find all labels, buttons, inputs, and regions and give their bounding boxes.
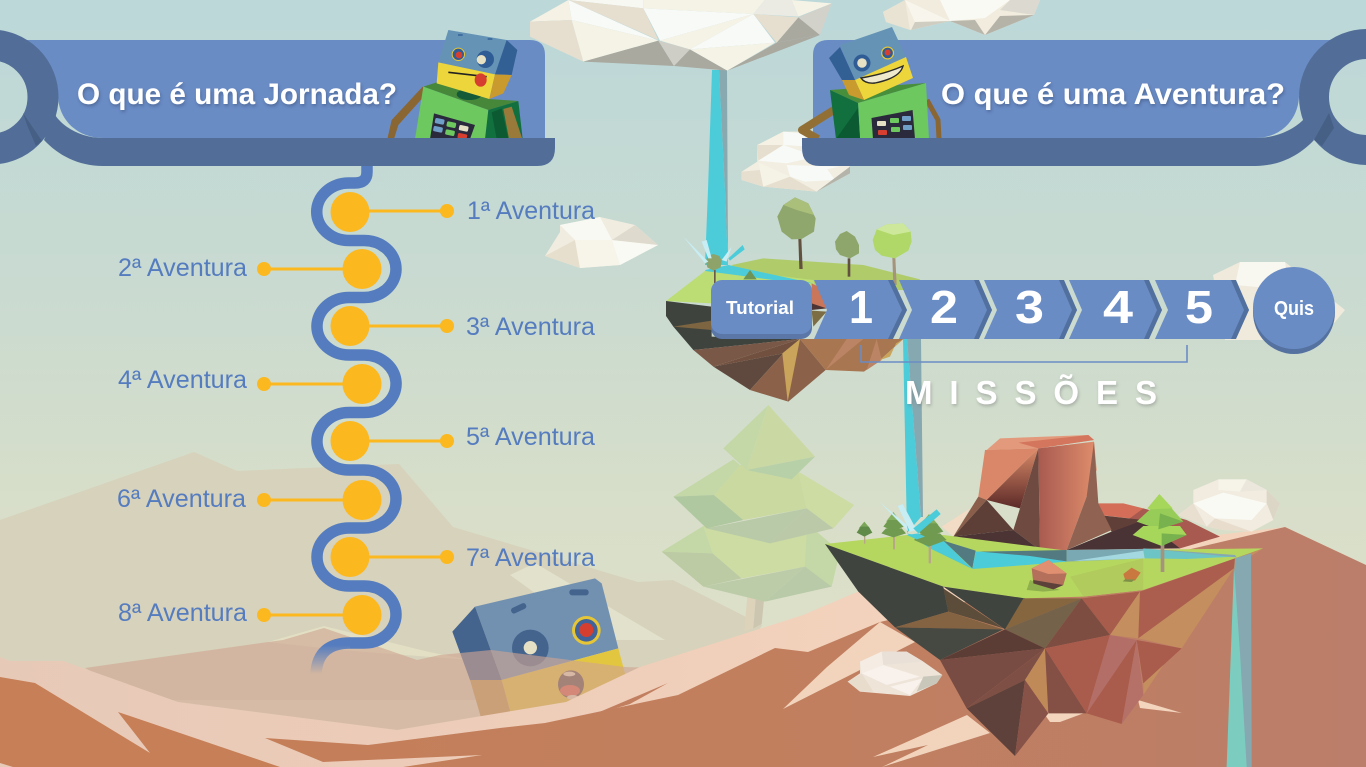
left ring shadow bbox=[23, 113, 42, 146]
right waterfall bbox=[1227, 553, 1252, 767]
step 5 bbox=[330, 421, 595, 461]
keypad bbox=[430, 113, 475, 140]
trees on small island bbox=[706, 197, 912, 285]
mission 2 bbox=[899, 280, 992, 339]
camera eye right bbox=[572, 616, 601, 645]
cloud: top right bbox=[883, 0, 1040, 35]
cloud: low bbox=[848, 652, 942, 696]
mesa rock bbox=[942, 435, 1220, 550]
rock small bbox=[1123, 568, 1141, 582]
pine trees bbox=[857, 494, 1187, 572]
Quis button: Quis bbox=[1274, 298, 1314, 320]
mission 1: 1 bbox=[849, 281, 873, 333]
left banner bbox=[0, 30, 555, 166]
step 2: 2ª Aventura bbox=[118, 254, 247, 282]
step 4: 4ª Aventura bbox=[118, 366, 247, 394]
mission 2: 2 bbox=[930, 281, 958, 333]
cloud: right of mesa bbox=[1178, 479, 1280, 532]
journey path bbox=[117, 166, 595, 674]
step 6 bbox=[117, 480, 382, 520]
step 3: 3ª Aventura bbox=[466, 313, 595, 341]
tree 3 bbox=[873, 223, 912, 285]
step 3 bbox=[330, 306, 595, 346]
left banner title: O que é uma Jornada? bbox=[77, 78, 397, 111]
middle waterfall between islands bbox=[903, 339, 923, 533]
camera eye left bbox=[512, 630, 549, 666]
missions bracket bbox=[861, 345, 1187, 362]
floating island: small bbox=[666, 258, 920, 402]
right banner ring bbox=[1314, 44, 1366, 150]
left banner ring bbox=[0, 45, 43, 149]
chevron row bbox=[711, 267, 1335, 354]
right banner lip bbox=[802, 118, 1314, 166]
step 6: 6ª Aventura bbox=[117, 485, 246, 513]
step 1 bbox=[330, 192, 595, 232]
tree small bbox=[706, 254, 722, 283]
translucent foreground hill bbox=[85, 628, 700, 740]
cloud: behind right banner bbox=[742, 132, 850, 192]
background mountains bbox=[0, 452, 762, 700]
mission 5 bbox=[1155, 280, 1249, 339]
river bbox=[907, 533, 1237, 569]
island underside bbox=[825, 544, 1263, 756]
robot: smiling bbox=[802, 27, 939, 139]
grass top bbox=[825, 535, 1263, 598]
left banner lip bbox=[44, 115, 555, 166]
Quis button bbox=[1253, 267, 1335, 354]
step 8: 8ª Aventura bbox=[118, 599, 247, 627]
line fade out bbox=[316, 643, 350, 674]
mission 5: 5 bbox=[1185, 281, 1213, 333]
step 7: 7ª Aventura bbox=[466, 544, 595, 572]
step 7 bbox=[330, 537, 595, 577]
mission 3: 3 bbox=[1015, 281, 1044, 333]
floating island: large with mesa bbox=[825, 435, 1263, 767]
screaming mouth bbox=[558, 670, 584, 700]
step 4 bbox=[118, 364, 382, 404]
foreground ground bbox=[0, 527, 1366, 767]
splash bbox=[879, 502, 941, 539]
step 5: 5ª Aventura bbox=[466, 423, 595, 451]
keypad bbox=[872, 110, 915, 139]
winding line bbox=[317, 166, 396, 643]
green strip bbox=[625, 668, 670, 695]
right banner title: O que é uma Aventura? bbox=[941, 78, 1285, 111]
step 1: 1ª Aventura bbox=[467, 197, 595, 225]
big pale pine tree bbox=[662, 405, 854, 632]
clouds bbox=[530, 0, 1345, 696]
crying camera robot behind the hill bbox=[452, 578, 627, 720]
Tutorial button bbox=[711, 280, 812, 339]
tree 2 bbox=[835, 231, 859, 277]
Tutorial button: Tutorial bbox=[726, 297, 794, 318]
upper waterfall from top cloud bbox=[705, 70, 728, 265]
left banner face bbox=[20, 40, 545, 138]
cloud: behind Quis bbox=[1213, 262, 1345, 340]
robot: tongue out bbox=[387, 30, 523, 140]
right banner bbox=[802, 27, 1366, 166]
right ring shadow bbox=[1314, 113, 1334, 146]
step 2 bbox=[118, 249, 382, 289]
mission 1 bbox=[814, 280, 907, 339]
cloud: top centre bbox=[530, 0, 832, 71]
tree 1 bbox=[777, 197, 816, 269]
mission 4 bbox=[1069, 280, 1162, 339]
step 8 bbox=[118, 595, 382, 635]
missions heading: MISSÕES bbox=[905, 374, 1157, 411]
mission 3 bbox=[984, 280, 1077, 339]
mission 4: 4 bbox=[1103, 281, 1133, 333]
splash on small island bbox=[683, 237, 745, 263]
rock large bbox=[1027, 560, 1067, 592]
right banner face bbox=[813, 40, 1345, 138]
cloud: middle bbox=[545, 217, 658, 268]
